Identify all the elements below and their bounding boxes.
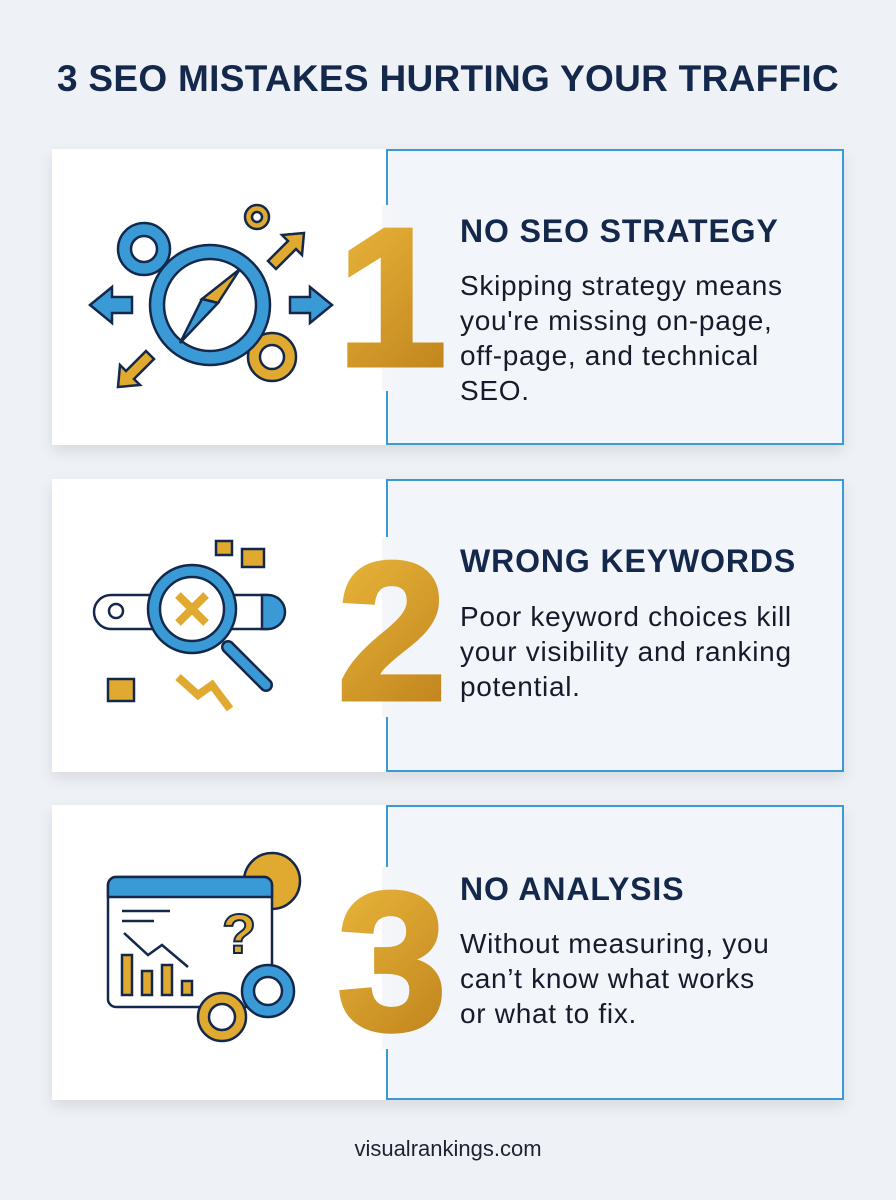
body text: Poor keyword choices kill your visibility and ranking potential. [460, 601, 792, 702]
panel: no seo strategy [52, 149, 844, 445]
panel: no analysis [52, 805, 844, 1100]
icon: analytics window with question marks [106, 852, 302, 1042]
body text: or what to fix. [460, 998, 637, 1029]
body text: Without measuring, you can’t know what works [460, 928, 770, 994]
icon: analytics window with question marks: ? [222, 902, 256, 965]
footer: visualrankings.com [354, 1136, 542, 1161]
heading: NO SEO STRATEGY [460, 213, 779, 249]
icon: compass with gears and arrows [88, 204, 334, 388]
title: 3 SEO MISTAKES HURTING YOUR TRAFFIC [57, 58, 839, 99]
body text: Skipping strategy means you're missing on‑page, off‑page, and technical SEO. [460, 270, 783, 406]
heading: WRONG KEYWORDS [460, 543, 796, 579]
body text [460, 928, 770, 1029]
heading: NO ANALYSIS [460, 871, 684, 907]
icon: magnifier with x [92, 540, 286, 712]
panel: wrong keywords [52, 479, 844, 772]
